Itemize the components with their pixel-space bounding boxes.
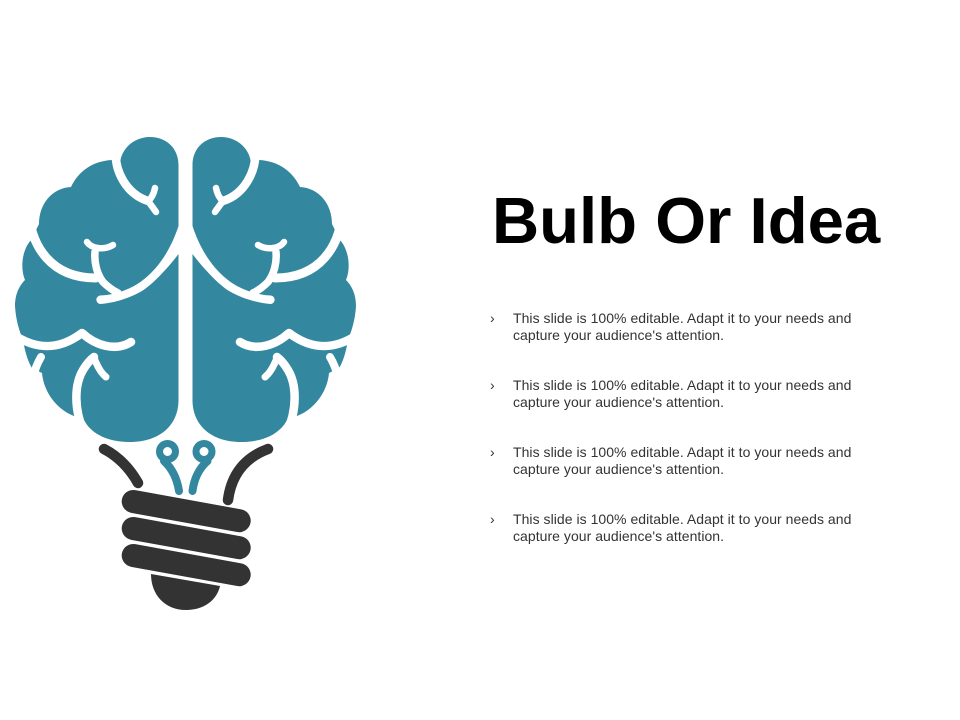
bullet 1: This slide is 100% editable. Adapt it to your needs and: [513, 310, 851, 326]
bullet 3: ›: [490, 444, 495, 460]
bullet 2: This slide is 100% editable. Adapt it to your needs and: [513, 377, 851, 393]
left brain hemisphere: [14, 137, 178, 442]
bullet 3: This slide is 100% editable. Adapt it to your needs and: [513, 444, 851, 460]
bullet 2: ›: [490, 377, 495, 393]
bullet 1: [490, 310, 851, 343]
bullet 2: capture your audience's attention.: [513, 394, 724, 410]
bulb screw base: [133, 502, 239, 575]
bullet 4: [490, 511, 851, 544]
right brain hemisphere: [192, 137, 357, 442]
bulb rays: [104, 449, 268, 500]
bullet 4: capture your audience's attention.: [513, 528, 724, 544]
bulb tip: [151, 574, 220, 610]
bullet 1: ›: [490, 310, 495, 326]
title: Bulb Or Idea: [492, 184, 880, 257]
bullet 2: [490, 377, 851, 410]
bullet 3: capture your audience's attention.: [513, 461, 724, 477]
bullet 4: This slide is 100% editable. Adapt it to your needs and: [513, 511, 851, 527]
filaments: [160, 444, 212, 491]
bullet 1: capture your audience's attention.: [513, 327, 724, 343]
bullet 4: ›: [490, 511, 495, 527]
bullet 3: [490, 444, 851, 477]
